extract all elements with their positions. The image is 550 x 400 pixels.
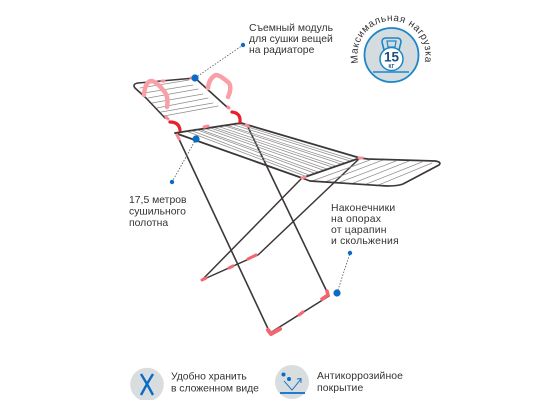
callout: drying length: полотна (129, 218, 168, 229)
callout: drying length (129, 135, 200, 229)
callout: leg tips: от царапин (331, 225, 387, 236)
feature: compact storage: Удобно хранить (171, 370, 247, 382)
feature: anti-corrosion coating: Антикоррозийное (317, 371, 403, 382)
callout: leg tips: и скольжения (331, 236, 399, 247)
rear legs (202, 158, 360, 280)
side wing wires (312, 160, 432, 186)
callout: drying length: сушильного (129, 206, 186, 218)
red hinge arcs (170, 112, 240, 130)
callout: removable module (191, 23, 333, 82)
callout: removable module: для сушки вещей (249, 34, 333, 45)
front legs (178, 125, 329, 333)
callout: leg tips: на опорах (331, 214, 382, 225)
icon: kettlebell: 15 (384, 50, 399, 64)
feature: compact storage (130, 368, 259, 400)
curved label (358, 21, 426, 63)
feature: anti-corrosion coating: покрытие (317, 383, 363, 394)
callout: removable module: Съемный модуль (249, 23, 333, 34)
callout: drying length: 17,5 метров (129, 195, 187, 206)
badge: maximum load (350, 16, 431, 83)
callout: leg tips (331, 203, 399, 297)
icon: kettlebell (373, 38, 409, 72)
side wing frame (302, 158, 440, 186)
removable module wires (140, 80, 218, 116)
main rack frame (175, 123, 360, 178)
pink leg tips and joints (162, 78, 362, 334)
callout: leg tips: Наконечники (331, 203, 395, 214)
pink radiator hooks (144, 75, 230, 107)
icon: kettlebell: КГ (389, 64, 395, 70)
feature: anti-corrosion coating (275, 365, 403, 399)
badge circle (364, 28, 418, 82)
drying rack illustration (134, 75, 440, 334)
main rack wires (186, 123, 354, 176)
callout: removable module: на радиаторе (249, 45, 315, 56)
feature: compact storage: в сложенном виде (171, 384, 259, 394)
badge: maximum load: Максимальная нагрузка (350, 16, 431, 64)
icon: water drops (275, 365, 309, 399)
icon: folded rack (130, 368, 164, 400)
removable module frame (134, 78, 228, 118)
